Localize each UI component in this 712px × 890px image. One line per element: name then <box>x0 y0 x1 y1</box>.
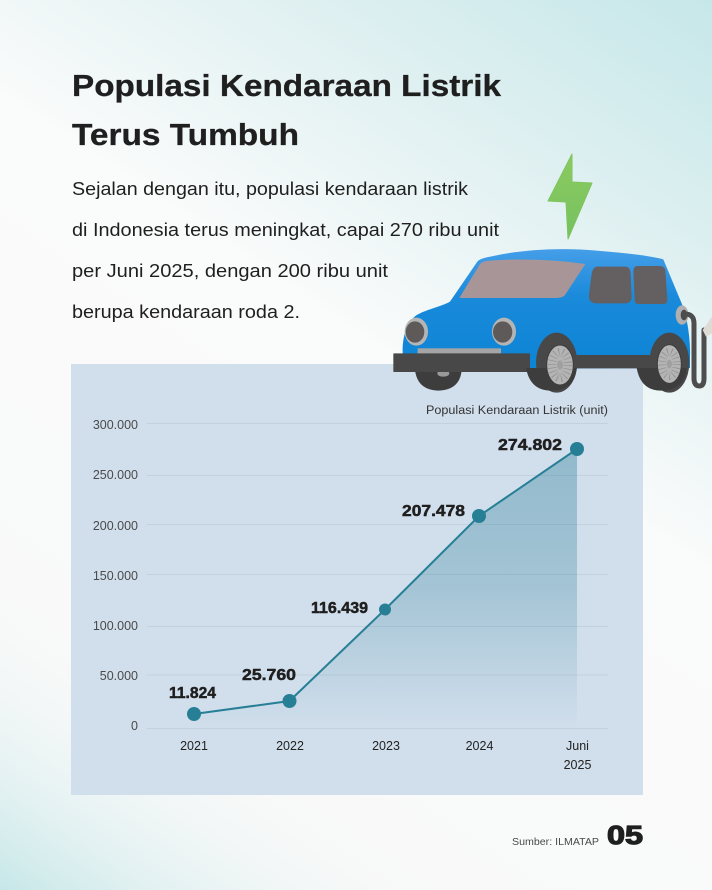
charging port and cable <box>676 305 712 386</box>
x axis labels: 2022 <box>276 739 304 753</box>
headlights <box>405 318 516 346</box>
y axis labels: 200.000 <box>93 519 138 533</box>
data value labels: 25.760 <box>242 667 296 684</box>
icon: lightning bolt <box>548 154 592 239</box>
title <box>72 68 502 152</box>
x axis labels: 2023 <box>372 739 400 753</box>
y axis labels: 100.000 <box>93 619 138 633</box>
intro text block: Sejalan dengan itu, populasi kendaraan listrik <box>72 179 469 199</box>
data value labels: 274.802 <box>498 437 562 454</box>
y axis labels: 150.000 <box>93 569 138 583</box>
front bumper <box>393 353 530 372</box>
page number: 05 <box>607 820 643 850</box>
intro text block: berupa kendaraan roda 2. <box>72 302 300 322</box>
intro text block: di Indonesia terus meningkat, capai 270 ribu unit <box>72 220 499 240</box>
area under line <box>194 449 577 728</box>
car body <box>403 249 690 369</box>
intro text block <box>72 179 499 322</box>
chart legend label: Populasi Kendaraan Listrik (unit) <box>426 405 608 417</box>
front wheel <box>526 333 577 393</box>
line chart <box>93 405 608 772</box>
y axis labels: 300.000 <box>93 418 138 432</box>
x axis labels: Juni <box>566 739 589 753</box>
source footer: Sumber: ILMATAP <box>512 836 599 848</box>
data value labels: 11.824 <box>169 685 216 702</box>
panel: chart background <box>71 364 643 795</box>
rear far wheel <box>415 370 462 391</box>
grid lines <box>147 424 608 728</box>
y axis labels: 250.000 <box>93 468 138 482</box>
side window rear <box>633 266 667 304</box>
x axis labels <box>180 739 591 772</box>
title: Populasi Kendaraan Listrik <box>72 68 502 103</box>
data points <box>187 442 584 721</box>
y axis labels <box>93 418 138 733</box>
y axis labels: 0 <box>131 719 138 733</box>
x axis labels: 2021 <box>180 739 208 753</box>
x axis labels: 2024 <box>466 739 493 753</box>
side sill <box>575 355 655 368</box>
windshield <box>459 259 585 298</box>
side window front <box>589 267 632 303</box>
data value labels: 116.439 <box>311 600 368 617</box>
data value labels <box>169 437 562 702</box>
trend line <box>194 449 577 714</box>
grille bar <box>418 348 501 354</box>
y axis labels: 50.000 <box>100 669 138 683</box>
title: Terus Tumbuh <box>72 117 299 152</box>
x axis labels: 2025 <box>564 758 591 772</box>
icon: blue electric car <box>393 249 712 393</box>
data value labels: 207.478 <box>402 503 465 520</box>
intro text block: per Juni 2025, dengan 200 ribu unit <box>72 261 388 281</box>
rear wheel <box>637 333 689 393</box>
